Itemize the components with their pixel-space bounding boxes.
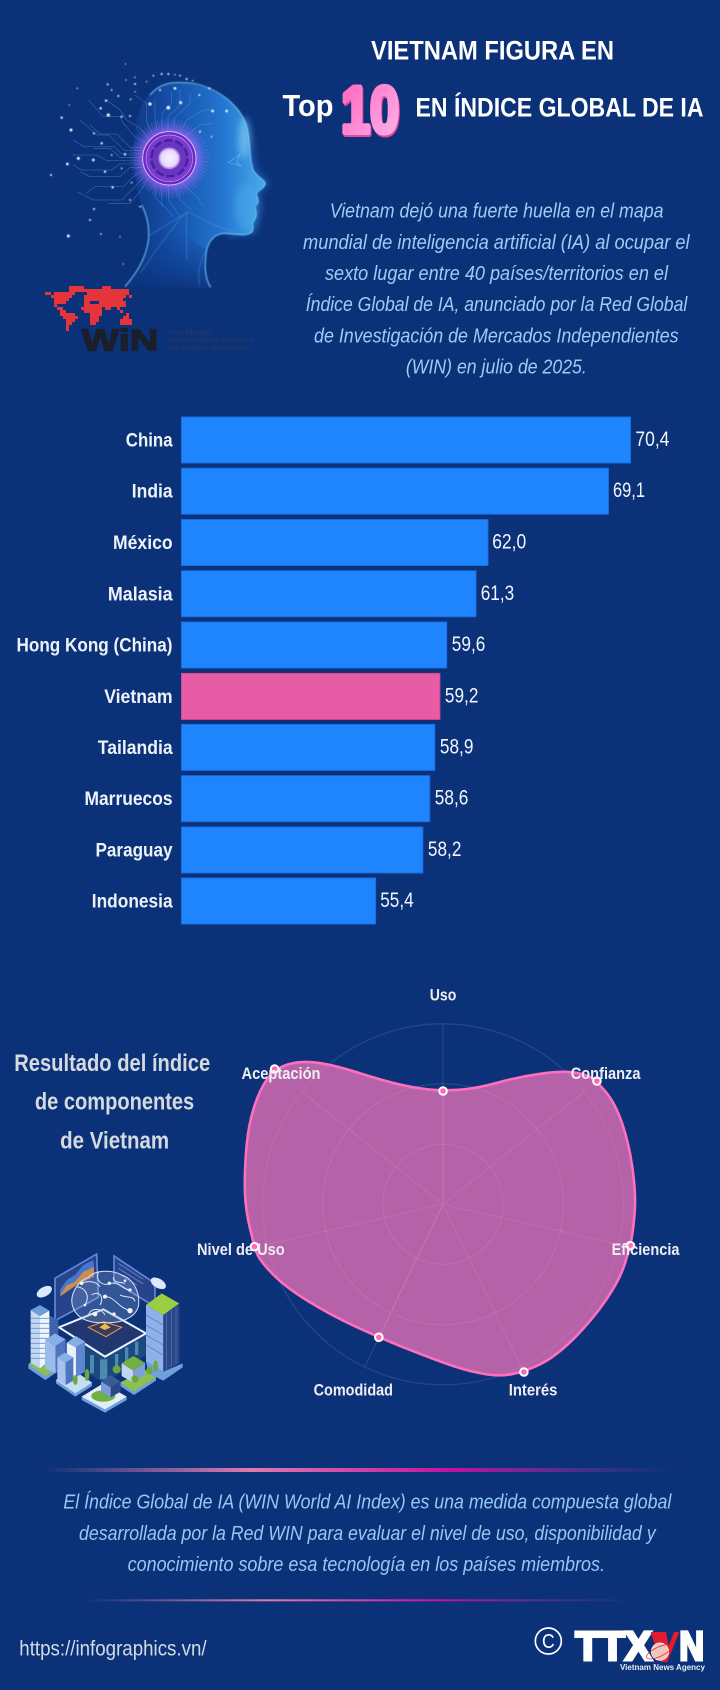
wordmark: N bbox=[679, 1623, 704, 1669]
radar grid outer bbox=[262, 1024, 624, 1385]
left towers bbox=[48, 1315, 58, 1337]
icon: smart city with brain bbox=[28, 1254, 183, 1413]
footnote text: conocimiento sobre esa tecnología en los países miembros. bbox=[128, 1554, 605, 1576]
logo: WIN: WiN bbox=[82, 324, 158, 358]
bar: México bbox=[113, 520, 526, 566]
intro text: sexto lugar entre 40 países/territorios en el bbox=[325, 262, 669, 285]
bar: China: China bbox=[126, 430, 173, 452]
bar: Indonesia: Indonesia bbox=[92, 890, 173, 912]
divider top bbox=[44, 1468, 675, 1472]
bar: Hong Kong bbox=[16, 622, 485, 668]
screens bbox=[55, 1254, 98, 1321]
bar: Vietnam bbox=[104, 673, 478, 719]
radar axis labels: Aceptación bbox=[242, 1065, 320, 1083]
central block bbox=[85, 1333, 146, 1383]
heading: component results: de componentes bbox=[35, 1088, 194, 1115]
logo: WIN: Of Market Research bbox=[169, 346, 249, 353]
right tower bbox=[146, 1293, 179, 1315]
trees bbox=[73, 1360, 158, 1385]
bar: India: India bbox=[132, 481, 173, 503]
big number 10: 10 bbox=[342, 74, 400, 148]
bar: Marruecos bbox=[84, 776, 468, 822]
divider bottom bbox=[83, 1599, 638, 1601]
bar: Vietnam: 59,2 bbox=[445, 684, 478, 707]
bar: India bbox=[132, 468, 645, 514]
radar axis labels: Eficiencia bbox=[612, 1241, 680, 1259]
bar: Marruecos: 58,6 bbox=[435, 787, 468, 810]
bar: Vietnam: Vietnam bbox=[104, 686, 173, 708]
wordmark bbox=[575, 1623, 704, 1669]
radar axis labels: Comodidad bbox=[314, 1382, 393, 1400]
bar: Tailandia: 58,9 bbox=[440, 735, 473, 758]
radar axis labels: Uso bbox=[430, 987, 456, 1005]
intro text: (WIN) en julio de 2025. bbox=[406, 355, 587, 378]
bar: Tailandia: Tailandia bbox=[98, 737, 173, 759]
radar axis labels: Interés bbox=[509, 1382, 557, 1400]
copyright symbol: C bbox=[542, 1631, 555, 1653]
bar: Paraguay: Paraguay bbox=[96, 840, 173, 862]
heading: component results bbox=[14, 1050, 210, 1154]
title: Top bbox=[282, 88, 334, 123]
intro text: de Investigación de Mercados Independientes bbox=[314, 324, 679, 347]
bar: Tailandia bbox=[98, 724, 473, 770]
logo: WIN: Independent Network bbox=[169, 338, 255, 345]
clouds bbox=[35, 1283, 54, 1300]
bar: China bbox=[126, 417, 670, 463]
heading: component results: de Vietnam bbox=[60, 1127, 169, 1154]
wordmark: TTX bbox=[575, 1623, 652, 1669]
bar: Marruecos: Marruecos bbox=[84, 788, 173, 810]
title bbox=[282, 36, 704, 148]
logo: WIN: Worldwide bbox=[169, 330, 211, 337]
bar: India: 69,1 bbox=[613, 479, 645, 502]
bar: Indonesia: 55,4 bbox=[380, 889, 414, 912]
title: VIETNAM FIGURA EN bbox=[371, 36, 614, 66]
bar: Malasia: 61,3 bbox=[481, 582, 514, 605]
source url: https://infographics.vn/ bbox=[19, 1638, 207, 1661]
bar: Hong Kong: 59,6 bbox=[452, 633, 485, 656]
brain bbox=[72, 1271, 139, 1323]
small buildings bbox=[122, 1356, 145, 1371]
big number 10: 10 bbox=[341, 72, 399, 146]
bar: México: México bbox=[113, 532, 173, 554]
radar chart bbox=[197, 987, 680, 1400]
radar axis labels: Confianza bbox=[571, 1065, 641, 1083]
bar: Paraguay: 58,2 bbox=[428, 838, 461, 861]
logo: WIN bbox=[45, 286, 255, 358]
bar: China: 70,4 bbox=[635, 428, 670, 451]
heading: component results: Resultado del índice bbox=[14, 1050, 210, 1077]
bar chart: top 10 countries bbox=[16, 417, 670, 924]
bar: México: 62,0 bbox=[492, 530, 526, 554]
intro text: Vietnam dejó una fuerte huella en el mapa bbox=[330, 200, 664, 223]
footnote text: desarrollada por la Red WIN para evaluar el nivel de uso, disponibilidad y bbox=[79, 1523, 656, 1545]
platforms bbox=[28, 1357, 57, 1380]
bar: Malasia: Malasia bbox=[108, 583, 173, 605]
bar: Indonesia bbox=[92, 878, 414, 924]
bar: Malasia bbox=[108, 571, 514, 617]
radar value shape bbox=[245, 1062, 635, 1375]
copyright symbol bbox=[535, 1628, 561, 1654]
logo: TTXVN bbox=[535, 1623, 706, 1672]
logo: TTXVN: Vietnam News Agency bbox=[620, 1663, 706, 1672]
radar axis labels bbox=[197, 987, 680, 1400]
footnote text bbox=[63, 1491, 672, 1576]
intro text bbox=[303, 200, 691, 378]
icon: AI head illustration bbox=[50, 63, 265, 287]
bar: Paraguay bbox=[96, 827, 461, 873]
bar: Hong Kong: Hong Kong (China) bbox=[16, 634, 172, 656]
radar axis labels: Nivel de Uso bbox=[197, 1241, 285, 1259]
